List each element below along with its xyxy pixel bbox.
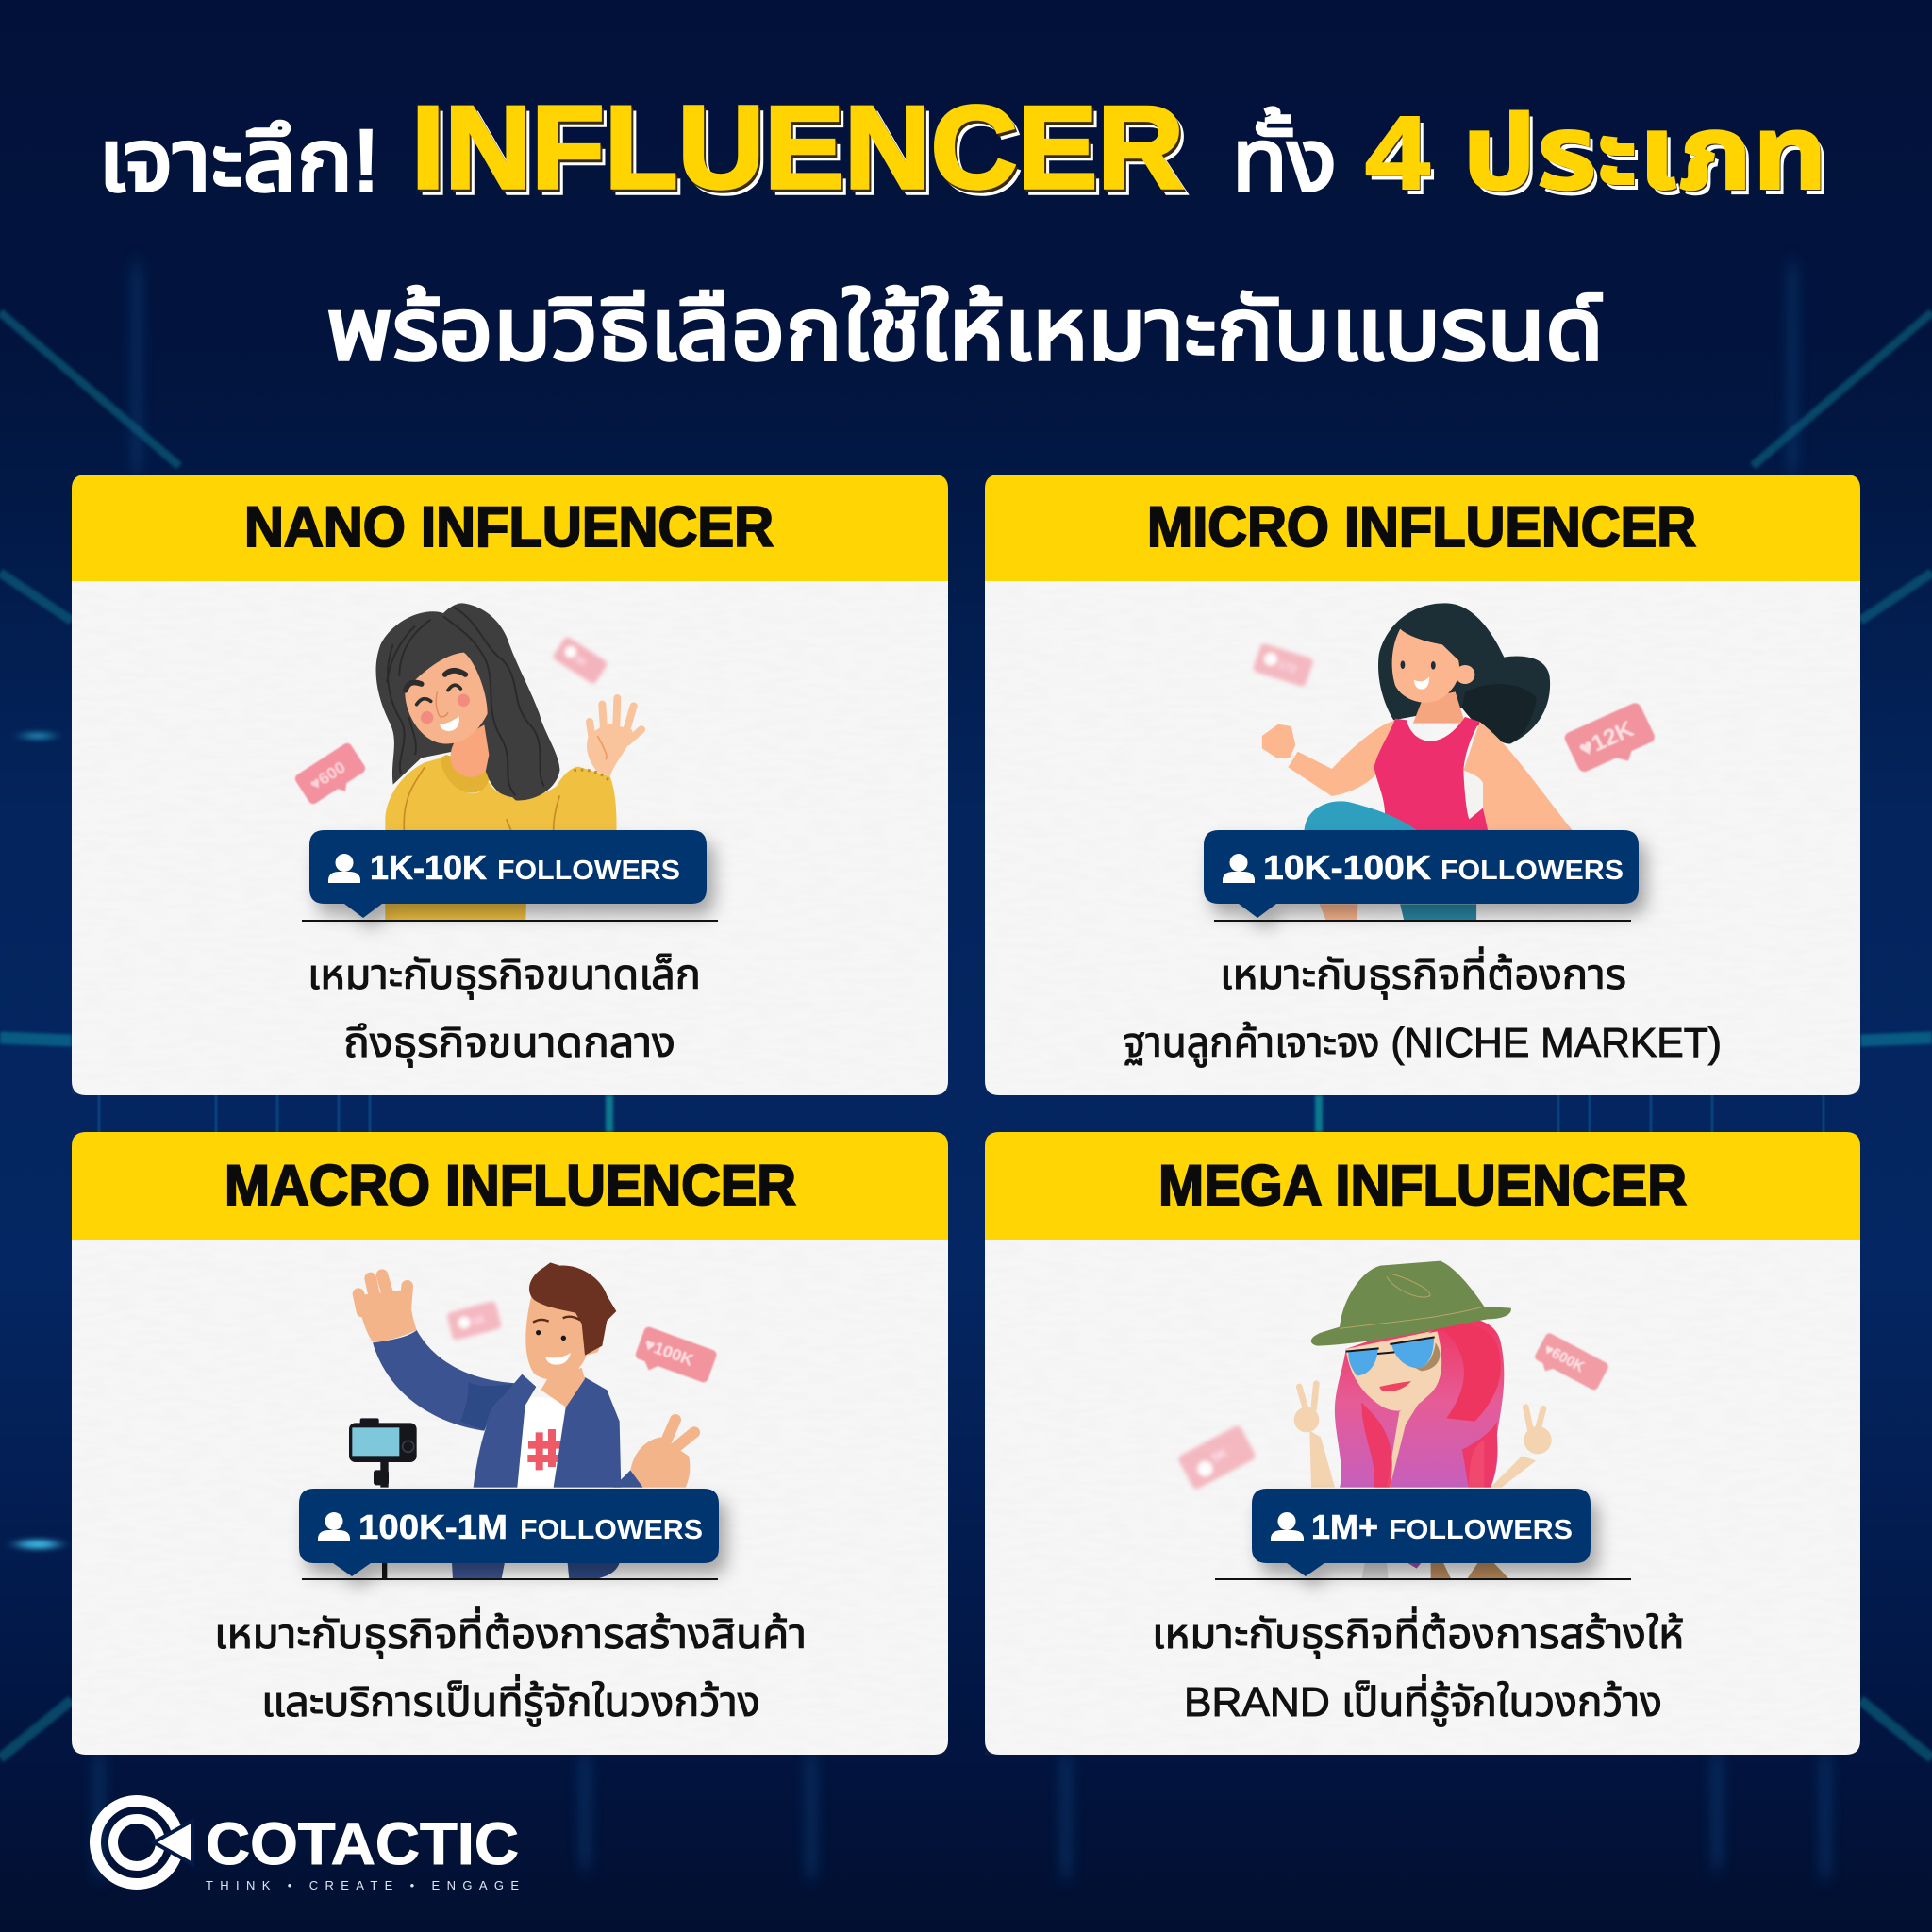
card texture: [72, 581, 948, 1095]
title line one: INFLUENCER: [411, 83, 1184, 213]
description: เหมาะกับธุรกิจที่ต้องการสร้างให้: [1152, 1606, 1684, 1659]
panel: micro influencer: [985, 475, 1860, 1095]
card body: [72, 1240, 948, 1755]
panel: macro influencer: [72, 1132, 948, 1755]
followers pill: FOLLOWERS: [1441, 856, 1624, 886]
heading: MICRO INFLUENCER: [1147, 495, 1696, 558]
heading bar: [72, 475, 948, 581]
description: BRAND เป็นที่รู้จักในวงกว้าง: [1184, 1674, 1662, 1727]
like badge 600: ♥600: [307, 758, 349, 794]
logo: cotactic: [95, 1801, 519, 1892]
followers pill: 10K-100K: [1263, 848, 1431, 887]
card body: [985, 581, 1860, 1095]
icon: person: [1223, 854, 1255, 883]
heading: MEGA INFLUENCER: [1158, 1154, 1687, 1217]
title line one: เจาะลึก!: [98, 113, 379, 209]
card texture: [72, 1240, 948, 1755]
right arm: [1463, 722, 1573, 830]
like badge 5K: 5K: [1209, 1445, 1230, 1465]
followers pill: FOLLOWERS: [520, 1515, 703, 1545]
description: เหมาะกับธุรกิจที่ต้องการ: [1220, 946, 1626, 1000]
tagline: THINK • CREATE • ENGAGE: [206, 1878, 519, 1892]
title line one: ทั้ง: [1232, 108, 1337, 209]
title line one: INFLUENCER: [413, 86, 1186, 216]
description: [1152, 1606, 1684, 1727]
like badge 1K: [446, 1301, 502, 1341]
like badge 1K: 1K: [471, 1313, 487, 1327]
like badge 12K: [1562, 701, 1660, 780]
like badge small: [552, 636, 608, 685]
followers pill: [1252, 1489, 1591, 1576]
illustration: waving woman: [293, 603, 641, 921]
heading bar: [985, 1132, 1860, 1240]
camera: [349, 1418, 417, 1579]
description: เหมาะกับธุรกิจขนาดเล็ก: [308, 952, 701, 1000]
heading bar: [72, 1132, 948, 1240]
description: [214, 1606, 807, 1727]
like badge 172: 172: [1276, 659, 1298, 675]
followers pill: 100K-1M: [358, 1507, 508, 1546]
icon: person: [328, 854, 360, 883]
description: ฐานลูกค้าเจาะจง (NICHE MARKET): [1124, 1020, 1722, 1068]
like badge 12K: ♥12K: [1575, 717, 1638, 762]
description: [308, 952, 701, 1068]
title line one: [98, 83, 1832, 219]
card body: [72, 581, 948, 1095]
like badge 600K: [1531, 1332, 1609, 1396]
icon: person: [1271, 1512, 1304, 1541]
like badge 5K: [1177, 1424, 1257, 1491]
like badge 100K: ♥100K: [641, 1335, 696, 1370]
panel: nano influencer: [72, 475, 948, 1095]
followers pill: 1K-10K: [370, 848, 487, 887]
title line one: 4 ประเภท: [1367, 97, 1829, 213]
like badge 600K: ♥600K: [1541, 1341, 1587, 1375]
title line one: 4 ประเภท: [1365, 95, 1827, 211]
icon: target with arrow: [95, 1801, 192, 1884]
card texture: [985, 1240, 1860, 1755]
heading bar: [985, 475, 1860, 581]
hair front strands: [469, 638, 559, 800]
title line one: 4 ประเภท: [1370, 101, 1832, 217]
description: เหมาะกับธุรกิจที่ต้องการสร้างสินค้า: [214, 1606, 807, 1659]
illustration: man with camera: [349, 1262, 718, 1579]
followers pill: 1M+: [1311, 1507, 1378, 1546]
wordmark: COTACTIC: [206, 1811, 519, 1877]
description: ถึงธุรกิจขนาดกลาง: [343, 1020, 675, 1068]
hash print: [527, 1429, 561, 1470]
panel: mega influencer: [985, 1132, 1860, 1755]
card texture: [985, 581, 1860, 1095]
title line one: INFLUENCER: [416, 89, 1189, 219]
illustration: dancing woman: [1252, 603, 1660, 921]
title line two: พร้อมวิธีเลือกใช้ให้เหมาะกับแบรนด์: [326, 282, 1604, 378]
illustration: woman with hat: [1177, 1261, 1609, 1579]
heading: NANO INFLUENCER: [244, 495, 774, 558]
like badge small: 50: [573, 654, 588, 669]
left arm: [1288, 720, 1395, 796]
raised hand: [357, 1290, 417, 1342]
like badge 600: [293, 741, 371, 811]
description: [1124, 946, 1722, 1068]
heading: MACRO INFLUENCER: [225, 1154, 796, 1217]
like badge 100K: [632, 1325, 718, 1391]
followers pill: [1204, 830, 1639, 918]
icon: person: [318, 1512, 350, 1541]
peace hand: [630, 1437, 690, 1488]
like badge 172: [1252, 642, 1314, 688]
followers pill: [309, 830, 707, 918]
followers pill: FOLLOWERS: [497, 856, 680, 886]
followers pill: [299, 1489, 719, 1576]
card body: [985, 1240, 1860, 1755]
arms and peace hands: [1309, 1431, 1536, 1488]
title: [98, 83, 1832, 378]
description: และบริการเป็นที่รู้จักในวงกว้าง: [261, 1674, 760, 1727]
followers pill: FOLLOWERS: [1389, 1515, 1573, 1545]
